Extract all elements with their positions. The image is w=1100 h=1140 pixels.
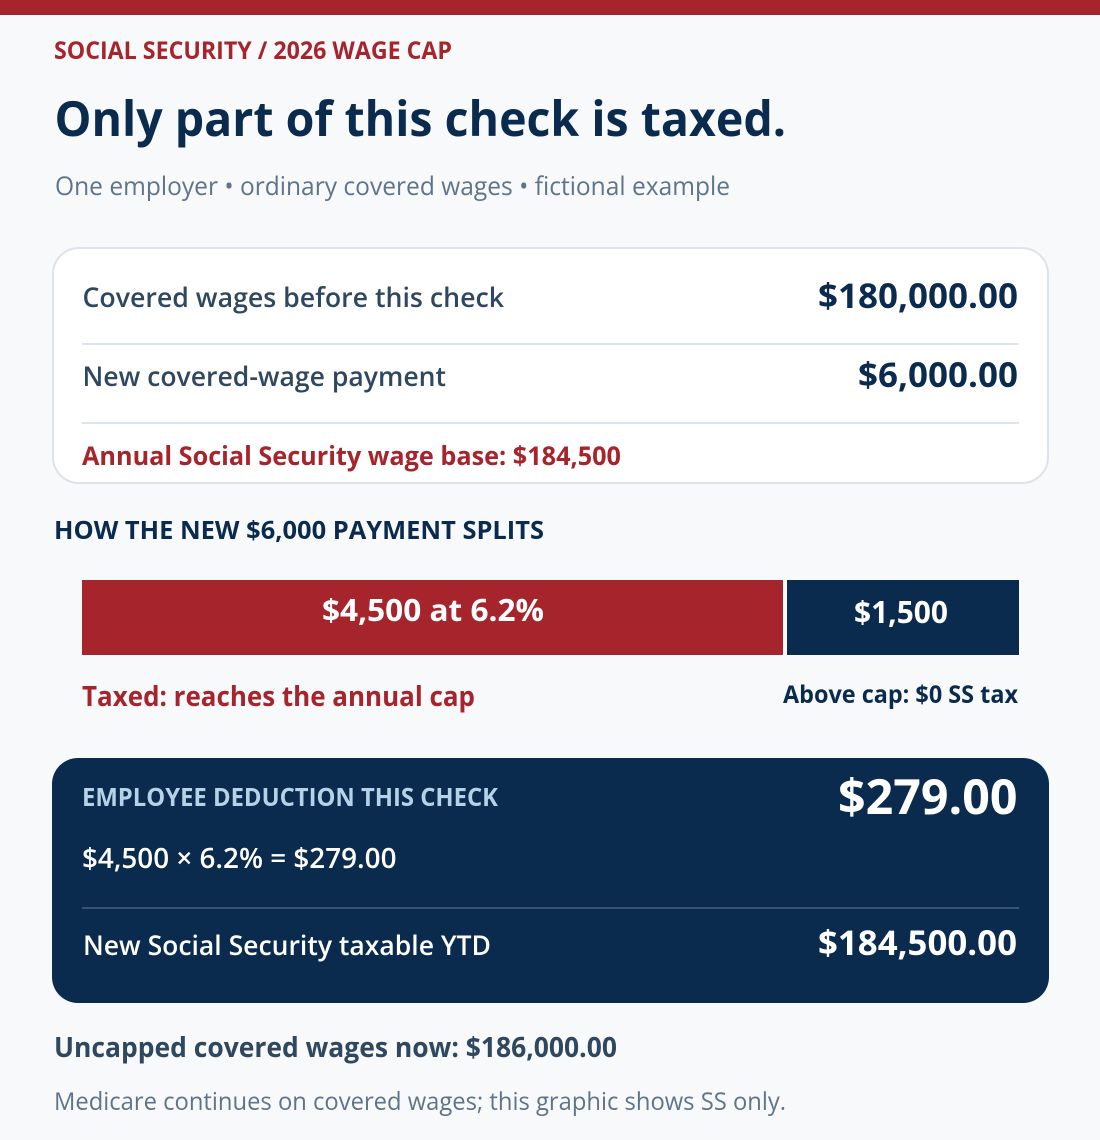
label: new payment: New covered-wage payment	[82, 357, 446, 394]
label: covered wages before: Covered wages before this check	[82, 278, 505, 315]
panel: wages	[53, 248, 1048, 483]
taxable YTD value: $184,500.00	[818, 919, 1017, 965]
subtitle: One employer • ordinary covered wages • fictional example	[55, 167, 730, 203]
taxed segment	[82, 580, 783, 655]
panel: employee deduction	[52, 758, 1049, 1003]
value: covered wages before: $180,000.00	[818, 272, 1018, 318]
above cap segment: $1,500	[854, 591, 948, 632]
section heading: HOW THE NEW $6,000 PAYMENT SPLITS	[54, 513, 544, 547]
uncapped wages note: Uncapped covered wages now: $186,000.00	[54, 1028, 617, 1066]
above cap segment	[787, 580, 1019, 655]
title: Only part of this check is taxed.	[54, 86, 786, 151]
formula: $4,500 × 6.2% = $279.00	[82, 839, 396, 877]
footnote: Medicare continues on covered wages; this graphic shows SS only.	[54, 1084, 786, 1118]
deduction heading: EMPLOYEE DEDUCTION THIS CHECK	[82, 780, 498, 814]
split bar	[82, 580, 1019, 655]
taxable YTD label: New Social Security taxable YTD	[83, 926, 491, 963]
eyebrow: SOCIAL SECURITY / 2026 WAGE CAP	[54, 34, 452, 67]
taxed segment: $4,500 at 6.2%	[322, 589, 544, 630]
top accent bar	[0, 0, 1100, 15]
deduction amount: $279.00	[838, 764, 1018, 829]
above cap label: Above cap: $0 SS tax	[783, 678, 1018, 711]
wage base note: Annual Social Security wage base: $184,500	[82, 437, 621, 473]
value: new payment: $6,000.00	[858, 351, 1018, 397]
taxed label: Taxed: reaches the annual cap	[82, 677, 475, 715]
